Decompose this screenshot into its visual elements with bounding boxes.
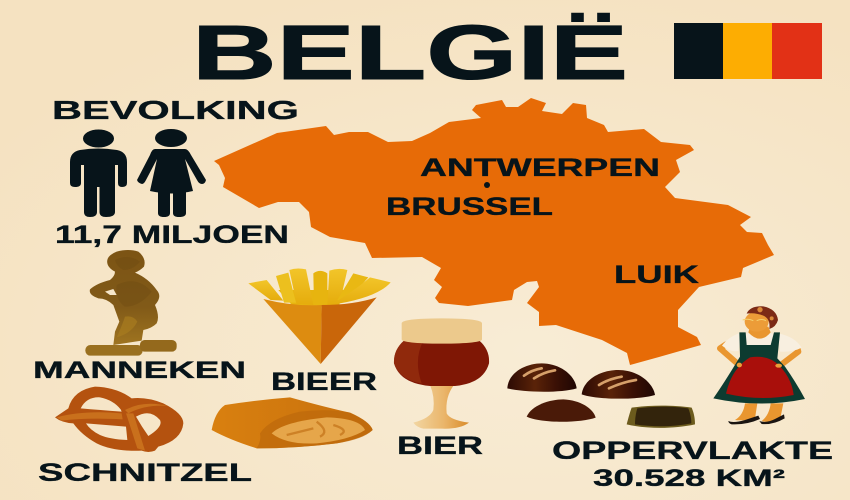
icon: woman <box>137 129 206 217</box>
label: Oppervlakte: OPPERVLAKTE <box>552 437 833 465</box>
praline 4 <box>627 406 695 428</box>
label: Bieer: BIEER <box>271 368 377 396</box>
value: 30.528 km²: 30.528 KM² <box>593 465 785 492</box>
glasses <box>743 319 766 321</box>
hair <box>747 306 778 329</box>
neck and face <box>748 327 771 339</box>
label: Antwerpen: ANTWERPEN <box>420 154 660 182</box>
marker: Brussels dot <box>484 182 490 188</box>
icon: Belgian flag <box>674 23 822 79</box>
fries <box>248 268 391 307</box>
illustration: Manneken Pis statue <box>85 250 177 356</box>
label: Brussel: BRUSSEL <box>386 193 553 221</box>
praline 2 <box>582 370 655 399</box>
praline 1 <box>507 363 577 392</box>
label: Schnitzel: SCHNITZEL <box>38 459 252 487</box>
shoes <box>728 414 785 424</box>
arms <box>720 344 798 366</box>
beer bowl <box>394 341 489 386</box>
label: Bier: BIER <box>397 432 483 460</box>
panel: map of Belgium <box>214 98 774 365</box>
highlight <box>394 341 423 383</box>
hands <box>737 363 742 367</box>
value: 11,7 miljoen: 11,7 MILJOEN <box>55 221 289 249</box>
stem and foot <box>413 385 469 429</box>
title: BELGIË <box>192 10 628 96</box>
legs <box>735 403 783 422</box>
apron <box>726 357 794 398</box>
label: Manneken: MANNEKEN <box>33 357 246 384</box>
dress <box>713 332 805 404</box>
praline 3 <box>527 399 596 422</box>
heading: Bevolking: BEVOLKING <box>52 95 299 125</box>
illustration: pretzel <box>55 387 183 452</box>
illustration: chocolates <box>507 363 695 428</box>
illustration: schnitzel roll <box>212 397 373 448</box>
icon: man <box>70 130 127 217</box>
illustration: woman in traditional dress <box>713 306 805 424</box>
panel: population <box>52 95 299 249</box>
illustration: beer glass <box>394 318 489 429</box>
map shape <box>214 98 774 365</box>
label: Luik: LUIK <box>614 261 699 289</box>
foam <box>402 318 482 344</box>
blouse <box>722 332 802 352</box>
illustration: fries cone <box>248 268 391 364</box>
panel: surface area <box>552 437 833 492</box>
cone <box>263 299 322 364</box>
